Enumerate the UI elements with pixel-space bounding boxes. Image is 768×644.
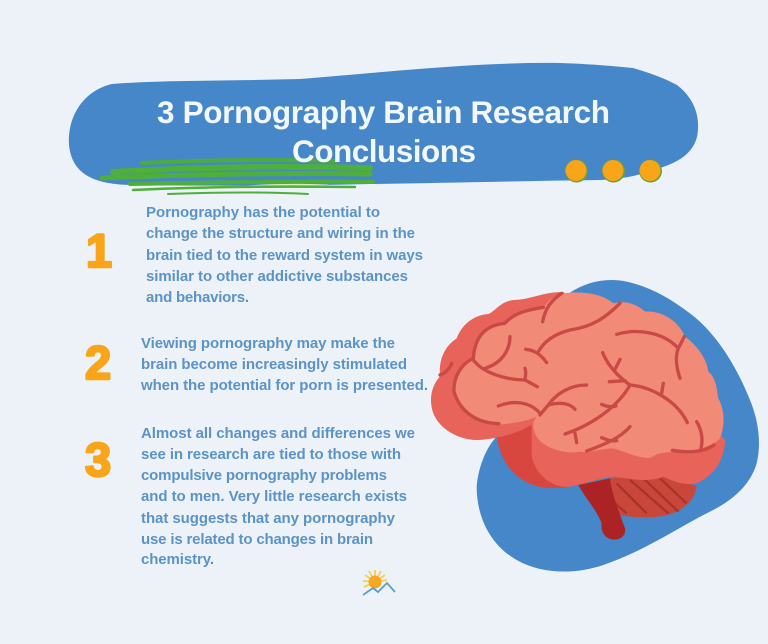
outer brain layer <box>431 292 725 487</box>
brain stem <box>578 478 625 540</box>
title <box>157 94 610 169</box>
conclusion 2 text <box>140 335 428 394</box>
conclusion 2 text: brain become increasingly stimulated <box>141 356 407 373</box>
cerebellum <box>597 475 697 517</box>
blue blob behind brain <box>477 280 759 572</box>
title banner: blue brush stroke <box>69 63 698 186</box>
conclusion 3 text: use is related to changes in brain <box>141 531 373 548</box>
green scribble accent <box>102 160 373 194</box>
conclusion 1 text <box>146 204 423 306</box>
sulci lines <box>440 293 714 452</box>
conclusion 1 text: and behaviors. <box>146 289 249 306</box>
sun rays <box>363 570 387 587</box>
number 3: 3 <box>85 433 111 486</box>
conclusion 3 text: chemistry. <box>141 551 214 568</box>
number 2: 2 <box>85 336 111 389</box>
conclusion 3 text: see in research are tied to those with <box>141 446 401 463</box>
conclusion 2 text: Viewing pornography may make the <box>141 335 395 352</box>
conclusion 1 text: brain tied to the reward system in ways <box>146 247 423 264</box>
conclusion 1 text: similar to other addictive substances <box>146 268 408 285</box>
conclusion 3 text: compulsive pornography problems <box>141 467 387 484</box>
logo: sun and mountains <box>363 570 395 595</box>
conclusion 3 text: that suggests that any pornography <box>141 510 396 527</box>
conclusion 3 text: Almost all changes and differences we <box>141 425 415 442</box>
number 1: 1 <box>86 224 112 277</box>
three orange dots <box>565 160 662 182</box>
illustration: brain <box>431 292 725 540</box>
conclusion 1 text: change the structure and wiring in the <box>146 225 415 242</box>
conclusion 3 text <box>141 425 415 568</box>
title: 3 Pornography Brain Research <box>157 94 610 130</box>
title: Conclusions <box>292 133 476 169</box>
conclusion 3 text: and to men. Very little research exists <box>141 488 407 505</box>
main light cortex <box>455 293 724 458</box>
conclusion 1 text: Pornography has the potential to <box>146 204 380 221</box>
lower dark lobe <box>497 423 577 488</box>
conclusion 2 text: when the potential for porn is presented. <box>140 377 428 394</box>
